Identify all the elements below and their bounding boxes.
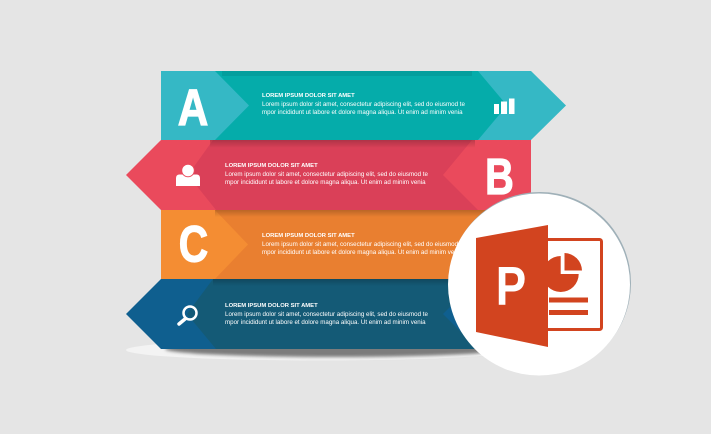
letter B: B (485, 148, 514, 205)
panel: B red: mpor incididunt ut labore et dolore magna aliqua. Ut enim ad minim venia (225, 179, 426, 186)
heading C: LOREM IPSUM DOLOR SIT AMET (262, 233, 355, 239)
panel: A teal: mpor incididunt ut labore et dolore magna aliqua. Ut enim ad minim venia (262, 109, 463, 116)
heading A: LOREM IPSUM DOLOR SIT AMET (262, 93, 355, 99)
icon: PowerPoint (476, 225, 602, 347)
icon: bars (494, 98, 514, 114)
heading B: LOREM IPSUM DOLOR SIT AMET (225, 163, 318, 169)
panel: D blue: mpor incididunt ut labore et dolore magna aliqua. Ut enim ad minim venia (225, 319, 426, 326)
panel: A teal (161, 71, 566, 140)
circle badge (448, 192, 631, 376)
heading D: LOREM IPSUM DOLOR SIT AMET (225, 303, 318, 309)
text B: Lorem ipsum dolor sit amet, consectetur adipiscing elit, sed do eiusmod te (225, 171, 428, 178)
panel: C orange: mpor incididunt ut labore et dolore magna aliqua. Ut enim ad minim venia (262, 249, 463, 256)
letter P: P (496, 255, 526, 317)
panel: D blue (126, 279, 531, 349)
floor shadow (126, 340, 514, 360)
icon: magnifier (179, 306, 196, 324)
letter C: C (179, 215, 208, 273)
text D: Lorem ipsum dolor sit amet, consectetur adipiscing elit, sed do eiusmod te (225, 311, 428, 318)
panel: B red (126, 140, 531, 210)
icon: person (176, 164, 200, 186)
text C: Lorem ipsum dolor sit amet, consectetur adipiscing elit, sed do eiusmod te (262, 241, 465, 248)
letter A: A (178, 79, 208, 136)
text A: Lorem ipsum dolor sit amet, consectetur adipiscing elit, sed do eiusmod te (262, 101, 465, 108)
panel: C orange (161, 210, 531, 279)
